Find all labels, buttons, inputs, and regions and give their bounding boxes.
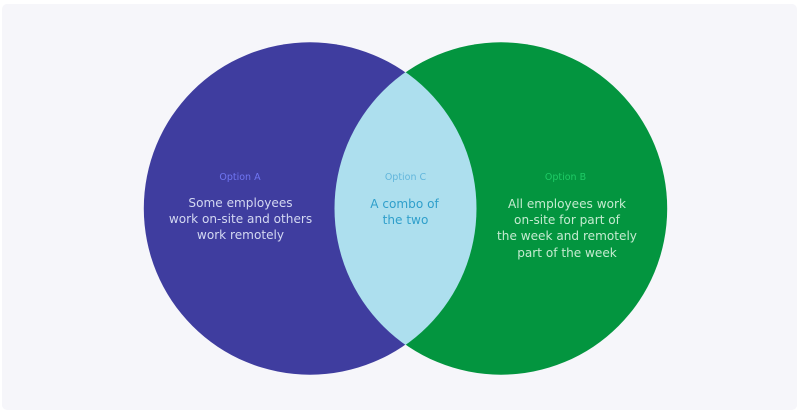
description: option C: the two xyxy=(383,213,428,227)
overlap: option C xyxy=(334,72,476,345)
circle: option B xyxy=(335,42,667,375)
circle: option A xyxy=(144,42,476,375)
description: option A: work remotely xyxy=(197,228,284,242)
description: option C: A combo of xyxy=(370,197,440,211)
description: option B: All employees work xyxy=(508,197,626,211)
label: option B: Option B xyxy=(545,172,586,183)
description: option B: the week and remotely xyxy=(497,229,637,243)
description: option A: work on-site and others xyxy=(169,212,312,226)
description: option B: part of the week xyxy=(517,246,617,260)
description: option A: Some employees xyxy=(188,196,293,210)
text block: option C xyxy=(370,172,440,227)
label: option A: Option A xyxy=(219,172,261,183)
text block: option A xyxy=(169,172,312,242)
text block: option B xyxy=(497,172,637,260)
description: option B: on-site for part of xyxy=(514,213,621,227)
label: option C: Option C xyxy=(385,172,427,183)
